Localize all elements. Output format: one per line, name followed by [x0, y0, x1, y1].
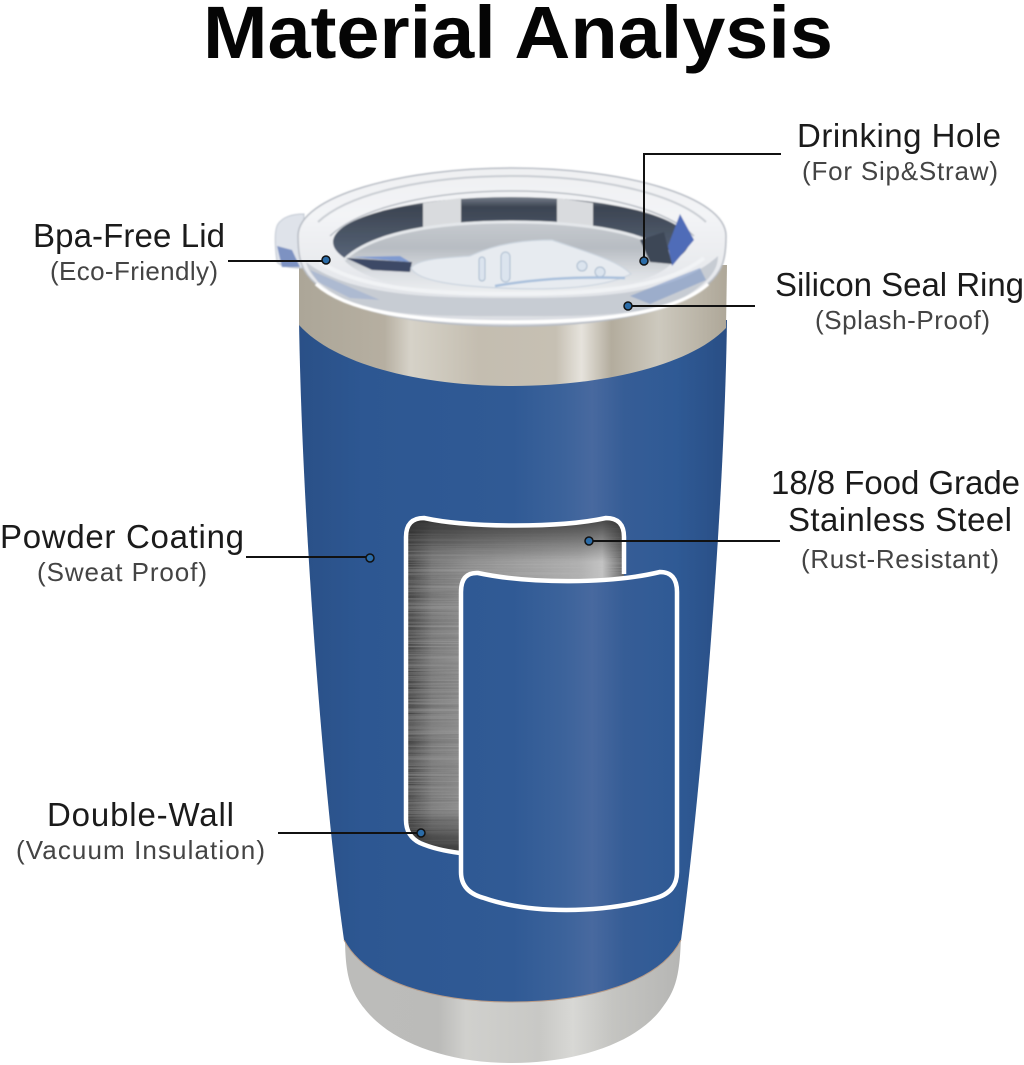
callout: Drinking Hole: [640, 117, 1001, 265]
slider blue edge: [495, 277, 625, 286]
lid front lip: [306, 256, 718, 316]
clear lid: [275, 168, 726, 326]
tumbler base: [345, 935, 681, 1063]
callout: 18/8 Food Grade Stainless Steel: Stainless Steel: [788, 501, 1012, 538]
lid rim highlight: [316, 284, 708, 322]
callout: Powder Coating: [0, 518, 374, 587]
callout: Powder Coating: Powder Coating: [0, 518, 244, 555]
callout: 18/8 Food Grade Stainless Steel: 18/8 Food Grade: [771, 464, 1020, 501]
callout: Drinking Hole: Drinking Hole: [797, 117, 1001, 154]
lid outer skirt: [298, 168, 726, 326]
copper edge of base: [344, 940, 681, 1002]
dark streak left: [346, 258, 412, 272]
callout: Silicon Seal Ring: [624, 266, 1024, 335]
callout: Double-Wall: (Vacuum Insulation): [16, 835, 265, 865]
callout: Silicon Seal Ring: Silicon Seal Ring: [775, 266, 1024, 303]
tumbler illustration: [275, 168, 727, 1063]
callout: Bpa-Free Lid: (Eco-Friendly): [50, 256, 218, 286]
callout: Bpa-Free Lid: [33, 217, 330, 286]
callout: Silicon Seal Ring: (Splash-Proof): [815, 305, 990, 335]
sip slider: [411, 240, 631, 289]
lid dark recess: [333, 197, 689, 287]
callout: Double-Wall: [16, 796, 425, 865]
callout: Bpa-Free Lid: Bpa-Free Lid: [33, 217, 225, 254]
lid clear reflection bars: [423, 198, 461, 228]
steel cutout: [406, 518, 624, 853]
blue foreground cutout: [461, 572, 677, 910]
lid floor: [344, 222, 676, 296]
sip slider pegs: [479, 252, 605, 282]
callout: 18/8 Food Grade Stainless Steel: [585, 464, 1020, 574]
callout: Double-Wall: Double-Wall: [47, 796, 234, 833]
blue reflection on lid: [668, 214, 694, 266]
callout: Powder Coating: (Sweat Proof): [37, 557, 207, 587]
blue reflection on rim: [630, 268, 706, 304]
callout: Drinking Hole: (For Sip&Straw): [802, 156, 998, 186]
lid tab: [275, 214, 304, 268]
steel rim band: [299, 265, 727, 386]
tumbler blue powder-coated body: [299, 320, 727, 1002]
lid top ring lines: [318, 176, 706, 222]
callout: 18/8 Food Grade Stainless Steel: (Rust-Resistant): [801, 544, 999, 574]
